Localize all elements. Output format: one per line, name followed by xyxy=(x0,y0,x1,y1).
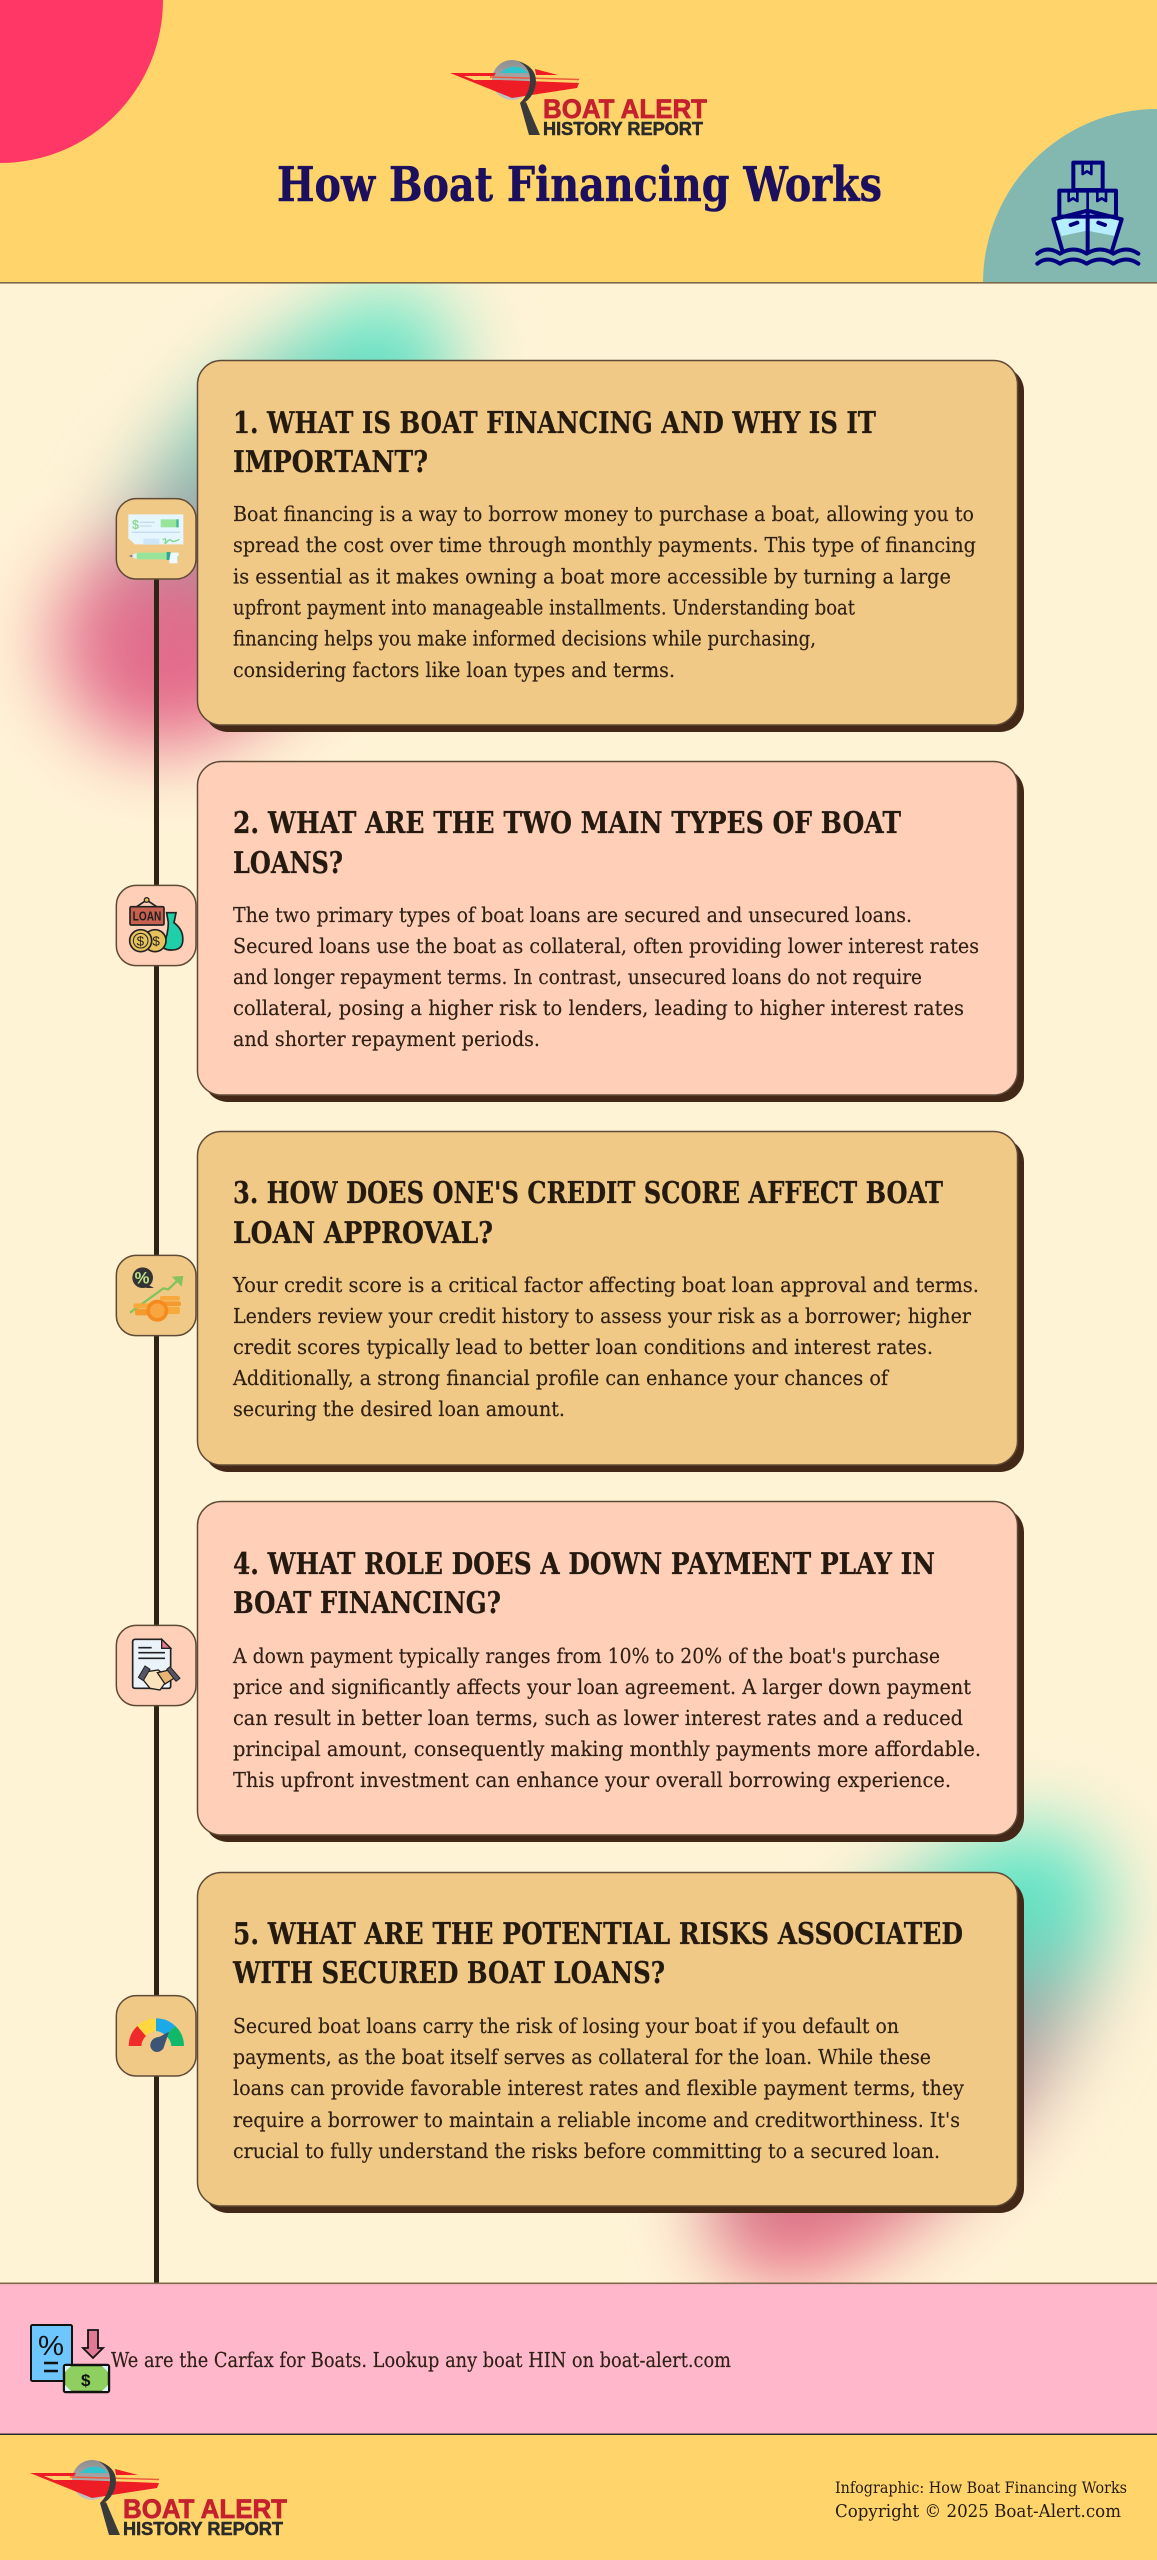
body text 2: Secured loans use the boat as collateral, often providing lower interest rates xyxy=(233,934,979,958)
panel: card 4 xyxy=(198,1502,1024,1842)
body text 1 xyxy=(233,502,976,682)
body text 4: price and significantly affects your loan agreement. A larger down payment xyxy=(233,1675,972,1699)
body text 2: collateral, posing a higher risk to lenders, leading to higher interest rates xyxy=(233,996,964,1020)
heading 2: 2. WHAT ARE THE TWO MAIN TYPES OF BOAT xyxy=(233,806,902,841)
blurred blob: top left xyxy=(12,251,518,809)
icon: rate document and money xyxy=(31,2325,109,2392)
body text 2: and shorter repayment periods. xyxy=(233,1027,540,1051)
icon box 3: percent and gold coins xyxy=(116,1255,196,1336)
body text 4: principal amount, consequently making monthly payments more affordable. xyxy=(233,1737,981,1761)
footer band xyxy=(0,2435,1157,2560)
blurred blob: bottom right xyxy=(636,1768,1157,2342)
decorative corner: teal circle xyxy=(983,109,1157,282)
heading 1: IMPORTANT? xyxy=(233,445,428,480)
panel: card 3 xyxy=(198,1132,1024,1472)
icon box 1: cheque and pen xyxy=(116,499,196,579)
footer credits xyxy=(835,2478,1127,2522)
logo: Boat Alert footer: BOAT ALERT xyxy=(123,2494,287,2524)
icon box 3: percent and gold coins: % xyxy=(135,1269,150,1288)
icon: cargo ship xyxy=(1037,163,1138,264)
body text 2: The two primary types of boat loans are secured and unsecured loans. xyxy=(233,903,912,927)
body text 3: Your credit score is a critical factor affecting boat loan approval and terms. xyxy=(232,1273,979,1297)
body text 4: can result in better loan terms, such as lower interest rates and a reduced xyxy=(233,1706,963,1730)
heading 5: 5. WHAT ARE THE POTENTIAL RISKS ASSOCIATED xyxy=(233,1917,963,1952)
body text 5 xyxy=(233,2014,964,2163)
body text 5: Secured boat loans carry the risk of losing your boat if you default on xyxy=(233,2014,899,2038)
icon box 4: contract and handshake xyxy=(116,1625,196,1706)
heading 3 xyxy=(233,1176,944,1251)
timeline line xyxy=(154,575,159,2283)
icon box 2: loan sign and coins xyxy=(116,885,196,966)
footer credits: Infographic: How Boat Financing Works xyxy=(835,2478,1127,2497)
heading 5: WITH SECURED BOAT LOANS? xyxy=(232,1956,665,1991)
panel: card 1 xyxy=(198,360,1024,732)
body text 3: Lenders review your credit history to assess your risk as a borrower; higher xyxy=(233,1304,971,1328)
body text 5: loans can provide favorable interest rates and flexible payment terms, they xyxy=(233,2076,964,2100)
heading 3: 3. HOW DOES ONE'S CREDIT SCORE AFFECT BOAT xyxy=(233,1176,944,1211)
heading 3: LOAN APPROVAL? xyxy=(233,1216,493,1251)
body text 1: is essential as it makes owning a boat more accessible by turning a large xyxy=(233,564,951,588)
heading 4: BOAT FINANCING? xyxy=(233,1586,501,1621)
heading 2 xyxy=(233,806,902,881)
icon box 1: cheque and pen: $ xyxy=(132,518,139,532)
logo: Boat Alert footer: HISTORY REPORT xyxy=(123,2519,283,2539)
body text 1: Boat financing is a way to borrow money to purchase a boat, allowing you to xyxy=(233,502,974,526)
logo: Boat Alert footer xyxy=(30,2460,287,2539)
logo: Boat Alert header: BOAT ALERT xyxy=(543,94,707,124)
body text 3: credit scores typically lead to better loan conditions and interest rates. xyxy=(233,1335,933,1359)
heading 1: 1. WHAT IS BOAT FINANCING AND WHY IS IT xyxy=(233,406,877,441)
panel: card 2 xyxy=(198,762,1024,1102)
body text 4: This upfront investment can enhance your overall borrowing experience. xyxy=(233,1768,951,1792)
body text 1: upfront payment into manageable installments. Understanding boat xyxy=(233,596,856,620)
decorative corner: pink circle xyxy=(0,0,163,163)
title: How Boat Financing Works xyxy=(277,157,882,213)
icon: rate document and money: $ xyxy=(81,2371,91,2390)
logo: Boat Alert header: HISTORY REPORT xyxy=(543,119,703,139)
heading 1 xyxy=(233,406,877,480)
footer credits: Copyright © 2025 Boat-Alert.com xyxy=(835,2501,1121,2522)
body text 4 xyxy=(232,1644,981,1792)
icon box 5: credit gauge xyxy=(116,1996,196,2076)
body text 5: require a borrower to maintain a reliable income and creditworthiness. It's xyxy=(233,2108,960,2132)
logo: Boat Alert header xyxy=(450,60,707,139)
band: call to action xyxy=(0,2282,1157,2435)
panel: card 5 xyxy=(198,1872,1024,2213)
icon box 2: loan sign and coins: $ xyxy=(152,934,160,949)
body text 1: considering factors like loan types and terms. xyxy=(233,658,675,682)
icon: rate document and money: % xyxy=(38,2330,64,2361)
heading 5 xyxy=(232,1917,963,1991)
icon box 2: loan sign and coins: LOAN xyxy=(133,910,161,924)
body text 3: Additionally, a strong financial profile can enhance your chances of xyxy=(232,1366,889,1390)
body text 4: A down payment typically ranges from 10% to 20% of the boat's purchase xyxy=(232,1644,940,1668)
body text 2 xyxy=(233,903,979,1051)
call to action text: We are the Carfax for Boats. Lookup any boat HIN on boat-alert.com xyxy=(111,2348,731,2372)
icon box 2: loan sign and coins: $ xyxy=(137,934,145,949)
body text 3: securing the desired loan amount. xyxy=(233,1397,565,1421)
heading 4: 4. WHAT ROLE DOES A DOWN PAYMENT PLAY IN xyxy=(233,1547,935,1582)
heading 4 xyxy=(233,1547,935,1621)
body text 1: financing helps you make informed decisions while purchasing, xyxy=(233,626,816,650)
header band xyxy=(0,0,1157,284)
heading 2: LOANS? xyxy=(233,846,343,881)
body text 5: crucial to fully understand the risks before committing to a secured loan. xyxy=(233,2139,940,2163)
body text 3 xyxy=(232,1273,979,1421)
body text 5: payments, as the boat itself serves as collateral for the loan. While these xyxy=(233,2045,931,2069)
body text 2: and longer repayment terms. In contrast, unsecured loans do not require xyxy=(233,965,922,989)
body text 1: spread the cost over time through monthly payments. This type of financing xyxy=(233,533,976,557)
